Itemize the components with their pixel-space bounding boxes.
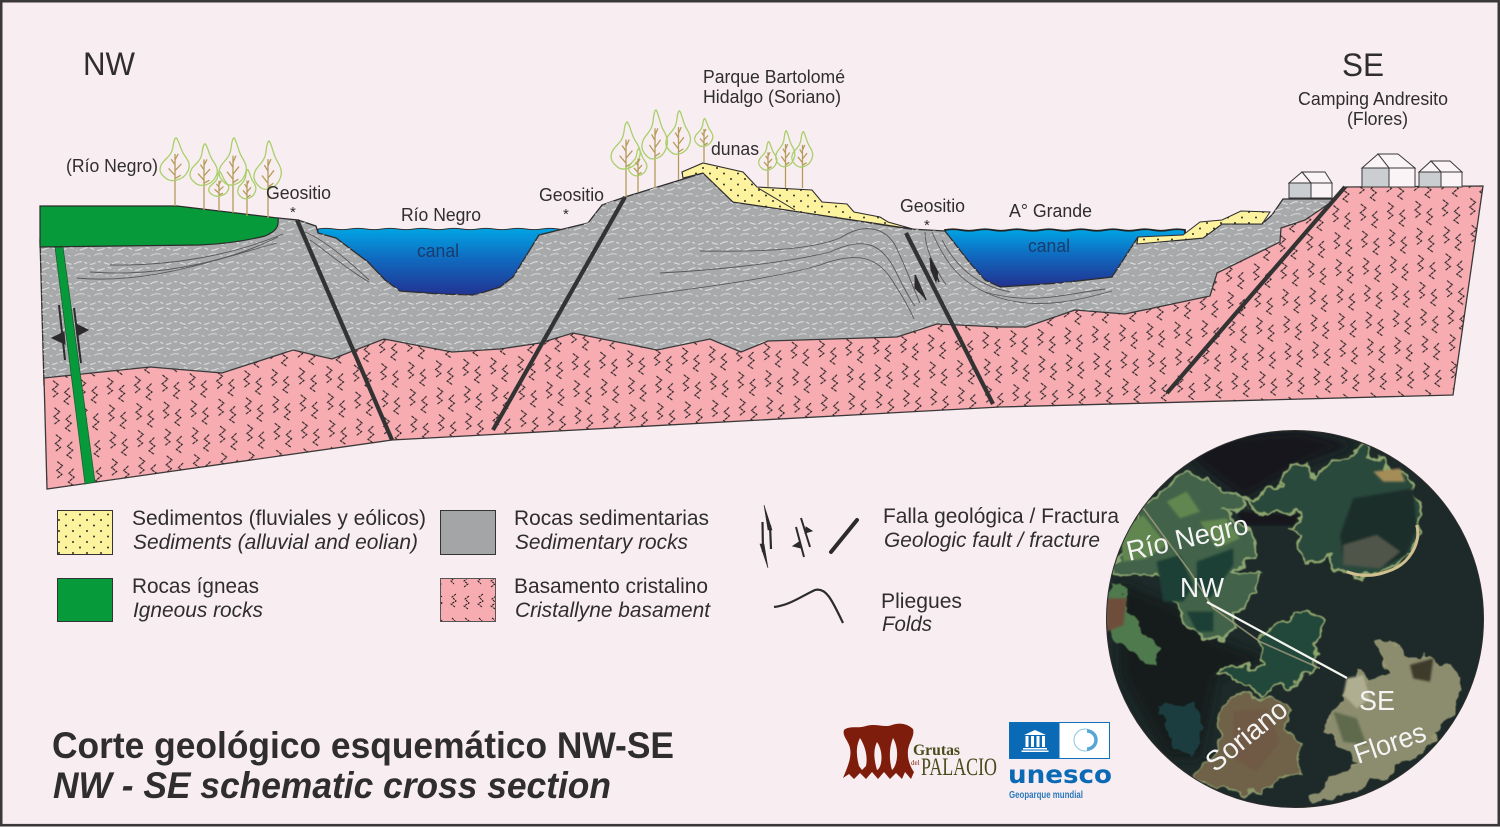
trees: Río Negro group — [160, 138, 281, 218]
legend icon: fault line — [831, 520, 857, 552]
dune internal contact — [758, 188, 795, 210]
legend icon: fault arrows — [760, 505, 772, 568]
legend text: basement: Basamento cristalino — [514, 575, 708, 598]
layer: sedimentary rocks — [40, 173, 1332, 385]
title — [52, 725, 674, 806]
west land — [1107, 585, 1157, 665]
label: A° Grande: A° Grande — [1009, 201, 1092, 221]
land detail patches — [1107, 468, 1433, 772]
heading: NW: NW — [83, 46, 136, 82]
legend text: igneous: Rocas ígneas — [132, 575, 259, 598]
title: NW - SE schematic cross section — [53, 765, 611, 806]
label: Geositio 2: Geositio — [539, 185, 604, 205]
legend text: sedimentary rocks: Rocas sedimentarias — [514, 507, 709, 530]
layer: crystalline basement — [44, 186, 1483, 489]
house 3 — [1419, 161, 1462, 187]
fault line 4 — [1167, 187, 1345, 393]
logo mark: rock arches — [843, 724, 914, 779]
legend swatch: sediments — [58, 510, 112, 554]
legend swatch: basement — [440, 578, 496, 622]
marker: geosite 3: * — [924, 217, 930, 234]
legend swatch: igneous — [58, 578, 112, 622]
fault line 1 — [297, 220, 392, 440]
layer: dune sediments, Parque Bartolomé Hidalgo — [682, 163, 913, 229]
legend icon: fold — [774, 590, 843, 623]
location label: Camping Andresito: (Flores) — [1347, 109, 1408, 129]
layer: alluvial sediments, Arroyo Grande — [1137, 211, 1270, 244]
north peninsula — [1247, 445, 1420, 577]
heading: SE: SE — [1342, 47, 1384, 83]
igneous dike — [55, 247, 95, 484]
legend text: basement: Cristallyne basament — [515, 599, 711, 622]
legend text: igneous: Igneous rocks — [133, 599, 263, 622]
trees: central hill group — [611, 110, 713, 197]
legend text: fault: Geologic fault / fracture — [884, 529, 1100, 552]
location label: Parque Bartolomé Hidalgo: Parque Bartolomé — [703, 67, 845, 87]
water: Río Negro canal — [318, 228, 569, 300]
fault line 3 — [906, 233, 993, 404]
label: Geositio 1: Geositio — [266, 183, 331, 203]
title: Corte geológico esquemático NW-SE — [52, 725, 674, 766]
map outline — [1106, 430, 1484, 808]
map imagery — [1106, 431, 1483, 807]
Soriano land — [1193, 695, 1303, 798]
map label: Flores: Flores — [1350, 716, 1430, 770]
Flores land — [1310, 638, 1463, 805]
section line NW-SE — [1207, 602, 1347, 678]
logo text: PALACIO: PALACIO — [921, 754, 997, 781]
legend icon: small fault arrows — [793, 518, 812, 557]
legend text: sediments: Sediments (alluvial and eolian) — [133, 531, 418, 554]
location label: Parque Bartolomé Hidalgo: Hidalgo (Soriano) — [703, 87, 841, 107]
logo text: del: del — [911, 759, 920, 767]
map label: NW: NW — [1180, 572, 1225, 603]
UNESCO wordmark: unesco — [1008, 760, 1112, 789]
satellite locator map — [1106, 430, 1484, 808]
south-west land — [1157, 702, 1207, 758]
house 1 — [1289, 172, 1332, 198]
map label: Soriano: Soriano — [1199, 693, 1293, 778]
roads — [1143, 508, 1320, 668]
map label: SE: SE — [1359, 685, 1395, 716]
fault displacement arrows, dike — [52, 305, 88, 363]
north-west land — [1113, 472, 1263, 638]
alluvial sediment dots — [1137, 211, 1270, 244]
label: canal 1: canal — [417, 241, 459, 261]
legend text: sedimentary rocks: Sedimentary rocks — [515, 531, 688, 554]
Geoparque mundial caption: Geoparque mundial — [1009, 790, 1083, 801]
location label: Camping Andresito: Camping Andresito — [1298, 89, 1448, 109]
geological cross section — [40, 110, 1483, 489]
land masses — [1107, 445, 1463, 805]
legend text: sediments: Sedimentos (fluviales y eólicos) — [132, 507, 426, 530]
dune sediment dots — [682, 163, 913, 229]
legend text: fault: Falla geológica / Fractura — [883, 505, 1119, 528]
water: Arroyo Grande canal — [945, 229, 1185, 290]
label: dunas: dunas — [711, 139, 759, 159]
marker: geosite 2: * — [563, 206, 569, 223]
logo: UNESCO Global Geopark — [1008, 722, 1112, 801]
logo: Grutas del Palacio — [843, 724, 997, 781]
label: canal 2: canal — [1028, 236, 1070, 256]
fold lines — [77, 229, 1112, 319]
central island — [1217, 612, 1327, 695]
legend swatch: sedimentary rocks — [440, 510, 496, 554]
UNESCO blue panel — [1010, 722, 1110, 758]
label: Río Negro river: Río Negro — [401, 205, 481, 225]
map label: Río Negro: Río Negro — [1123, 509, 1251, 567]
fault displacement arrows, fault 3 — [915, 258, 939, 300]
label: Geositio 3: Geositio — [900, 196, 965, 216]
legend text: folds: Pliegues — [881, 590, 962, 613]
label: (Río Negro): (Río Negro) — [66, 156, 158, 176]
house 2 — [1362, 154, 1415, 187]
marker: geosite 1: * — [290, 204, 296, 221]
logo text: Grutas: Grutas — [913, 742, 960, 759]
trees: dunes group — [759, 131, 813, 188]
legend — [58, 505, 1119, 636]
igneous sill — [40, 206, 278, 247]
UNESCO temple icon — [1022, 730, 1048, 752]
Geopark circular emblem — [1074, 729, 1096, 751]
legend text: folds: Folds — [882, 613, 932, 636]
fault line 2 — [493, 197, 625, 430]
